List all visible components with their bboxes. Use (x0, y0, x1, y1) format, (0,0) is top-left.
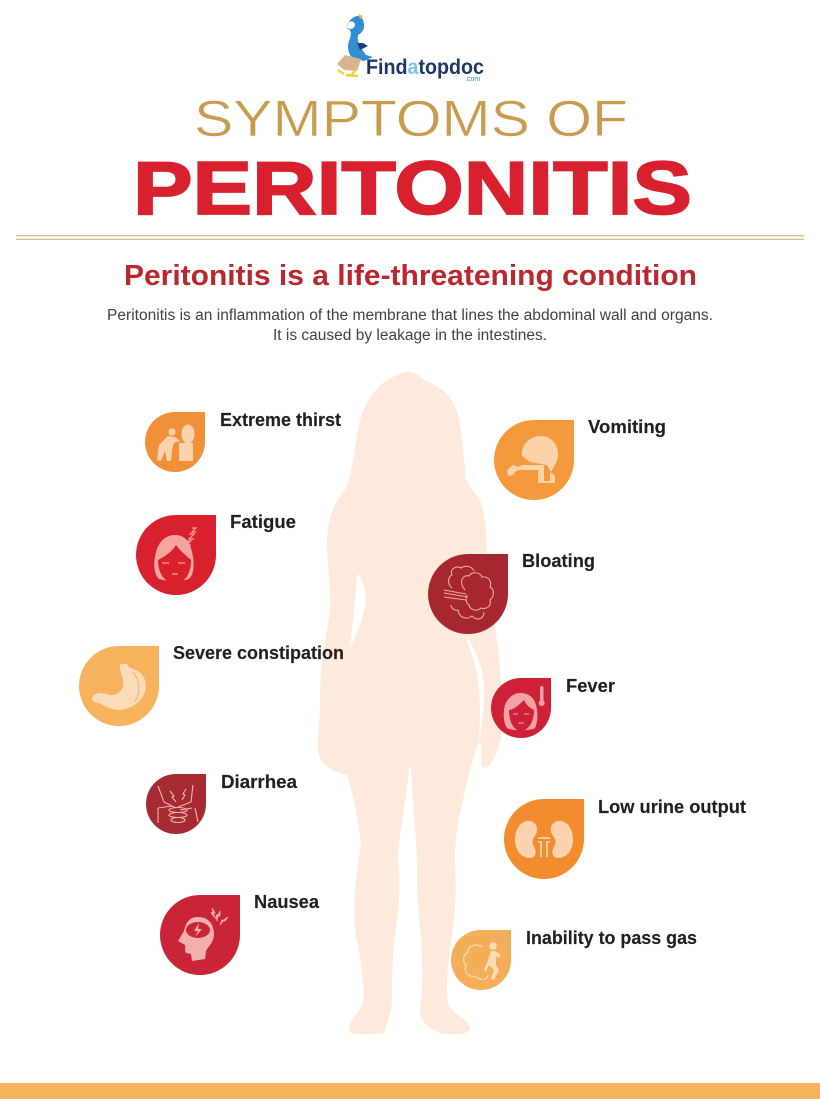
label: Fatigue (230, 511, 296, 532)
symptom: severe constipation (79, 642, 344, 726)
symptom: fever (491, 675, 615, 738)
body silhouette (318, 372, 503, 1034)
drop icon: sleeping face (136, 515, 216, 595)
subheading: Peritonitis is a life-threatening condition (124, 260, 697, 292)
footer bar (0, 1083, 820, 1099)
drop icon: face with thermometer (491, 678, 551, 738)
label: Extreme thirst (220, 409, 341, 430)
icon: duck mascot (337, 14, 373, 76)
drop icon: vomiting head profile (494, 420, 574, 500)
logo domain: .com (465, 76, 480, 83)
drop icon: person reaching for water (145, 412, 205, 472)
intro text: It is caused by leakage in the intestines. (273, 327, 547, 344)
drop icon: gas cloud (428, 554, 508, 634)
intro text: Peritonitis is an inflammation of the membrane that lines the abdominal wall and organs. (107, 307, 713, 324)
label: Severe constipation (173, 642, 344, 663)
label: Inability to pass gas (526, 927, 697, 948)
title: Symptoms of: SYMPTOMS OF (194, 90, 628, 147)
symptom: vomiting (494, 416, 666, 500)
label: Low urine output (598, 796, 746, 817)
symptom: fatigue (136, 511, 296, 595)
symptom: inability to pass gas (451, 927, 697, 990)
label: Diarrhea (221, 771, 298, 792)
logo wordmark: Findatopdoc (366, 56, 484, 79)
symptom: nausea (160, 891, 320, 975)
drop icon: person passing gas (451, 930, 511, 990)
drop icon: head with lightning (160, 895, 240, 975)
symptom: bloating (428, 550, 595, 634)
drop icon: stomach (79, 646, 159, 726)
label: Fever (566, 675, 615, 696)
label: Nausea (254, 891, 320, 912)
symptom: low urine output (504, 796, 746, 879)
symptom: diarrhea (146, 771, 298, 834)
intro text (107, 307, 713, 344)
title: Peritonitis: PERITONITIS (133, 146, 692, 230)
drop icon: abdominal pain (146, 774, 206, 834)
drop icon: kidneys (504, 799, 584, 879)
logo: Findatopdoc (337, 14, 484, 83)
symptom: extreme thirst (145, 409, 341, 472)
label: Vomiting (588, 416, 666, 437)
label: Bloating (522, 550, 595, 571)
